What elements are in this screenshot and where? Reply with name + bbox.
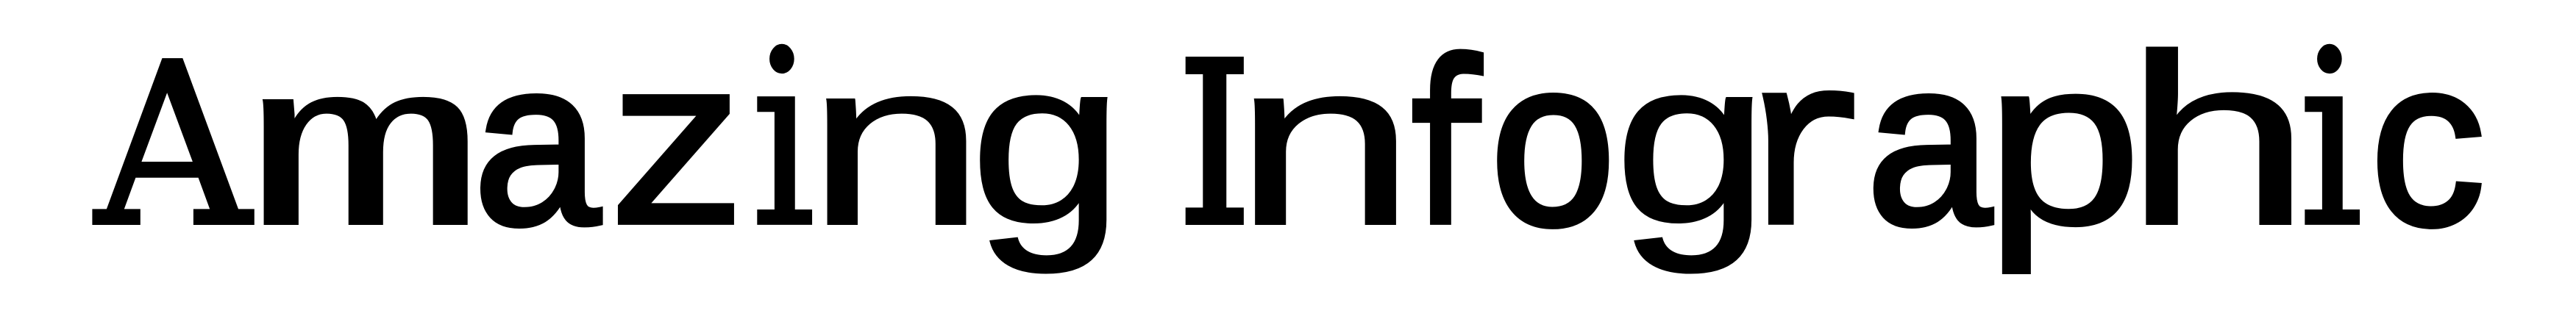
word: Amazing: n (799, 28, 994, 295)
word: Infographic: n (1226, 28, 1424, 295)
word: Infographic: r (1740, 24, 1871, 293)
word: Amazing: z (603, 26, 750, 293)
word: Infographic: o (1486, 26, 1620, 295)
word: Amazing: i (751, 0, 816, 281)
word: Infographic: f (1405, 30, 1490, 295)
word: Amazing: g (962, 26, 1130, 295)
word: Infographic: g (1607, 26, 1775, 295)
word: Infographic (1178, 0, 2494, 298)
word: Infographic: a (1862, 27, 1999, 295)
word: Amazing: a (469, 26, 608, 295)
word: Infographic: i (2299, 0, 2363, 281)
word: Infographic: h (2116, 21, 2320, 298)
word: Infographic: c (2367, 27, 2494, 295)
word: Amazing (92, 0, 1130, 295)
word: Amazing: m (243, 28, 488, 295)
word: Infographic: I (1178, 15, 1252, 274)
word: Infographic: p (1978, 26, 2150, 295)
word: Amazing: A (92, 16, 253, 276)
